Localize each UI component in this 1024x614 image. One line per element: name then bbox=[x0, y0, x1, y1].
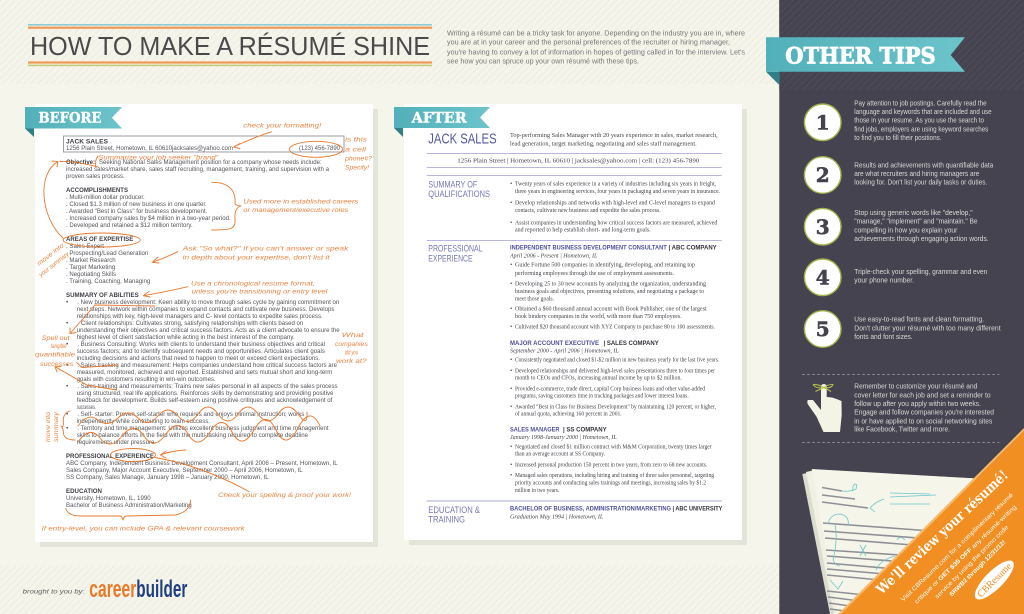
tip 2 bbox=[804, 157, 994, 193]
resume summary of abilities: including decisions and actions that need to happen to meet or exceed client expectations. bbox=[77, 355, 320, 362]
resume summary of abilities: goals with customers resulting in win-win outcomes. bbox=[77, 376, 216, 383]
resume objective: proven sales process. bbox=[66, 173, 125, 180]
brought to you by careerbuilder logo: brought to you by: bbox=[23, 588, 85, 595]
icon: finger with string reminder bbox=[807, 384, 842, 432]
after professional experience: • bbox=[510, 357, 512, 364]
after education and training bbox=[428, 505, 723, 524]
resume accomplishments: . Increased company sales by $4 million in a two-year period. bbox=[66, 215, 231, 222]
after professional experience: Provided e-commerce, trade direct, capital Corp business loans and other value-added bbox=[515, 385, 706, 392]
after professional experience: performing employees through the use of employment assessments. bbox=[515, 270, 674, 277]
resume areas of expertise: . Training, Coaching, Managing bbox=[66, 278, 151, 285]
handwritten annotations: or management/executive roles bbox=[243, 207, 349, 214]
resume summary of abilities: skills to balance efforts in the field with the multi-tasking required to complete deadline bbox=[77, 432, 308, 439]
after education and training: EDUCATION & bbox=[428, 505, 480, 515]
resume professional experience: PROFESSIONAL EXPEREINCE bbox=[66, 453, 155, 460]
after professional experience: Managed sales operations, including hiring and training of three sales personnel, targeting bbox=[515, 472, 715, 479]
tip 1 bbox=[804, 98, 992, 142]
handwritten annotations: unless you're transitioning or entry level bbox=[192, 288, 328, 295]
after professional experience: • bbox=[510, 306, 512, 313]
handwritten annotations: Specify! bbox=[345, 164, 369, 172]
resume summary of abilities: • bbox=[66, 411, 69, 418]
resume summary of abilities: measured, monitored, achieved and reported. Established and sets mutual short and long-term bbox=[77, 369, 333, 376]
handwritten annotations: What bbox=[342, 332, 365, 339]
after professional experience: Cultivated $20 thousand account with XYZ Company to purchase 80 to 100 assessments. bbox=[515, 324, 715, 331]
promo: orange corner banner: service by using the promo code bbox=[934, 524, 1011, 600]
resume summary of abilities: • bbox=[66, 383, 69, 390]
reminder text: Remember to customize your résumé and bbox=[854, 382, 977, 391]
tip 3 bbox=[804, 208, 989, 245]
after summary of qualifications bbox=[427, 180, 722, 240]
after summary of qualifications: QUALIFICATIONS bbox=[428, 189, 490, 199]
after summary of qualifications: • bbox=[510, 181, 512, 188]
after professional experience: September 2000 - April 2006 | Hometown, IL bbox=[510, 348, 619, 355]
resume summary of abilities: successes. bbox=[77, 404, 96, 411]
after professional experience: January 1998-January 2000 | Hometown, IL bbox=[510, 434, 617, 441]
resume contact box: 1256 Plain Street, Hometown, IL 60610jacksales@yahoo.com bbox=[66, 145, 233, 152]
after summary of qualifications: SUMMARY OF bbox=[428, 180, 478, 190]
brought to you by careerbuilder logo bbox=[23, 576, 187, 603]
panel: before resume bbox=[25, 104, 378, 547]
resume accomplishments: . Awarded "Best in Class" for business development. bbox=[66, 208, 207, 215]
resume summary of abilities: • bbox=[66, 341, 69, 348]
resume summary of abilities: Client relationships: Cultivates strong, satisfying relationships with clients based on bbox=[81, 320, 304, 327]
resume professional experience: Sales Company, Major Account Executive, September 2000 – April 2006, Hometown, IL bbox=[66, 467, 303, 474]
resume professional experience: SS Company, Sales Manage, January 1998 – January 2000, Hometown, IL bbox=[66, 474, 269, 481]
after professional experience: Awarded "Best in Class for Business Development" by maintaining 120 percent, or higher, bbox=[515, 403, 716, 410]
tip 2: Results and achievements with quantifiable data bbox=[854, 160, 994, 169]
panel: other tips sidebar bbox=[766, 0, 1024, 614]
resume summary of abilities: using structured, real life applications. Reinforces skills by demonstrating and providing positive bbox=[77, 390, 334, 397]
tip 2: looking for. Don't list your daily tasks or duties. bbox=[854, 178, 987, 187]
intro paragraph bbox=[447, 28, 745, 66]
reminder text: follow up after you apply within two weeks. bbox=[854, 399, 981, 408]
tip 5: Use easy-to-read fonts and clean formatting. bbox=[854, 315, 984, 324]
resume summary of abilities: feedback for development. Builds self-esteem using positive critiques and acknowledgement of bbox=[77, 397, 333, 404]
tip 5: fonts and font sizes. bbox=[854, 332, 913, 341]
promo: orange corner banner: Visit CBResume.com for a complimentary résumé bbox=[901, 492, 1015, 603]
after professional experience: • bbox=[510, 472, 512, 479]
intro paragraph: you are at in your career and the personal preferences of the recruiter or hiring manager, bbox=[447, 38, 730, 47]
tip 3: Stop using generic words like "develop," bbox=[854, 208, 973, 217]
reminder text: in or have applied to on social networking sites bbox=[854, 416, 993, 425]
resume contact box: JACK SALES bbox=[66, 138, 109, 146]
handwritten annotations: tangible bbox=[51, 343, 67, 350]
resume accomplishments: ACCOMPLISHMENTS bbox=[66, 187, 129, 194]
handwritten annotations: move into bbox=[36, 242, 66, 268]
resume objective: Objective: bbox=[66, 159, 95, 166]
resume accomplishments bbox=[66, 187, 231, 229]
after professional experience: meet those goals. bbox=[515, 295, 554, 302]
icon: marked-up resume pages bbox=[802, 469, 985, 614]
tip 2: are what recruiters and hiring managers are bbox=[854, 169, 979, 178]
reminder text bbox=[854, 382, 994, 433]
resume summary of abilities: • bbox=[66, 320, 69, 327]
resume summary of abilities: • bbox=[66, 299, 69, 306]
after professional experience: EXPERIENCE bbox=[428, 254, 473, 264]
after summary of qualifications: three years in engineering services, four years in packaging and seven years in insurance. bbox=[515, 188, 720, 195]
after summary of qualifications: and reported to help establish short- and long-term goals. bbox=[515, 227, 651, 234]
handwritten annotations: Ask "So what?" If you can't answer or speak bbox=[181, 246, 349, 253]
before ribbon: BEFORE bbox=[38, 111, 102, 127]
after education and training: TRAINING bbox=[428, 514, 465, 524]
resume accomplishments: . Closed $1.3 million of new business in one quarter. bbox=[66, 201, 207, 208]
promo: orange corner banner: critique or GET $35 OFF any résumé-writing bbox=[914, 505, 1018, 605]
resume summary of abilities: . Sales training and measurements: Trains new sales personal in all aspects of the sales process bbox=[77, 383, 338, 390]
after professional experience: book bindery companies in the world, with more than 750 employees. bbox=[515, 313, 682, 320]
resume summary of abilities: success factors; and to identify subsequent needs and opportunities. Articulates client goals bbox=[77, 348, 326, 355]
resume accomplishments: . Multi-million dollar producer. bbox=[66, 194, 145, 201]
tip 4 bbox=[804, 259, 987, 296]
logo: CBResume: CBResume bbox=[975, 561, 1015, 600]
resume education: Bachelor of Business Administration/Marketing bbox=[66, 502, 192, 509]
after summary of qualifications: contacts, cultivate new business and expedite the sales process. bbox=[515, 207, 661, 214]
handwritten annotations: Spell out bbox=[42, 335, 71, 342]
resume objective: Seeking National Sales Management position for a company whose needs include: bbox=[99, 159, 322, 166]
after professional experience: million in two years. bbox=[515, 487, 560, 494]
handwritten annotations: a cell bbox=[345, 146, 367, 154]
intro paragraph: see how you can spruce up your own résumé with these tips. bbox=[447, 56, 639, 66]
tip 1: 1 bbox=[816, 110, 830, 134]
tip 4: 4 bbox=[816, 266, 830, 290]
after professional experience: • bbox=[510, 461, 512, 468]
resume accomplishments: . Developed and retained a $12 million territory. bbox=[66, 222, 193, 229]
handwritten annotations: Check your spelling & proof your work! bbox=[218, 492, 351, 499]
intro paragraph: Writing a résumé can be a tricky task for anyone. Depending on the industry you are in, where bbox=[447, 28, 745, 37]
resume summary of abilities: . Self- starter: Proven self-starter who requires and enjoys minimal instruction; works bbox=[77, 411, 305, 418]
handwritten annotations: work at? bbox=[336, 358, 367, 365]
after professional experience: • bbox=[510, 324, 512, 331]
tip 1: to find you to fill their positions. bbox=[854, 133, 942, 142]
resume summary of abilities: . New business development: Keen ability to move through sales cycle by gaining commitment on bbox=[77, 299, 340, 306]
after summary of qualifications: Develop relationships and networks with high-level and C-level managers to expand bbox=[515, 200, 716, 207]
resume areas of expertise: . Market Research bbox=[66, 257, 116, 264]
resume summary of abilities: highest level of client satisfaction while acting in the best interest of the company. bbox=[77, 334, 295, 341]
tip 5 bbox=[804, 311, 1001, 347]
intro paragraph: you're having to convey a lot of information in hopes of getting called in for the interview. Let's bbox=[447, 47, 745, 56]
resume summary of abilities: . Territory and time management: Utilizes excellent business judgment and time management bbox=[77, 425, 329, 432]
handwritten annotations: is this bbox=[345, 137, 368, 144]
handwritten annotations: check your formatting! bbox=[243, 122, 321, 130]
handwritten annotations: successes bbox=[40, 361, 74, 368]
after professional experience: of annual quota, achieving 160 percent in 2001. bbox=[515, 411, 622, 418]
resume summary of abilities: . Sales tracking and measurement: Helps companies understand how critical success factors are bbox=[77, 362, 337, 369]
resume contact box: (123) 456-7890 bbox=[299, 145, 340, 152]
after professional experience: Guide Fortune 500 companies in identifying, developing, and retaining top bbox=[515, 262, 696, 269]
resume summary of abilities: relationships with key, high-level managers and C- level contacts to expedite sales process. bbox=[77, 313, 323, 320]
after professional experience: • bbox=[510, 281, 512, 288]
reminder text: Engage and follow companies you're interested bbox=[854, 408, 994, 417]
after professional experience: Developed relationships and delivered high-level sales presentations three to four times per bbox=[515, 367, 716, 374]
handwritten annotations: move into bbox=[45, 412, 52, 442]
after professional experience: INDEPENDENT BUSINESS DEVELOPMENT CONSULTANT bbox=[510, 245, 667, 252]
reminder text: cover letter for each job and set a reminder to bbox=[854, 390, 991, 399]
brought to you by careerbuilder logo: builder bbox=[136, 576, 187, 603]
resume education: EDUCATION bbox=[66, 488, 102, 495]
resume summary of abilities: requirements under pressure. bbox=[77, 439, 156, 446]
title: HOW TO MAKE A RÉSUMÉ SHINE bbox=[30, 31, 430, 61]
after professional experience: • bbox=[510, 367, 512, 374]
after professional experience: | SALES COMPANY bbox=[604, 340, 659, 347]
resume contact box bbox=[64, 136, 344, 152]
after professional experience: Increased personal production 150 percent in two years, from zero to 68 new accounts. bbox=[515, 461, 708, 468]
after education and training: Graduation May 1994 | Hometown, IL bbox=[510, 513, 604, 520]
tip 4: your phone number. bbox=[854, 276, 914, 285]
after summary of qualifications: • bbox=[510, 219, 512, 226]
promo: orange corner banner: SRWB2 through 12/31/12! bbox=[949, 540, 1007, 598]
after summary of qualifications: • bbox=[510, 200, 512, 207]
other tips ribbon bbox=[766, 37, 965, 85]
after professional experience: • bbox=[510, 403, 512, 410]
before ribbon bbox=[25, 107, 122, 137]
resume areas of expertise: . Target Marketing bbox=[66, 264, 116, 271]
handwritten annotations: your summary bbox=[37, 251, 71, 279]
resume areas of expertise: . Prospecting/Lead Generation bbox=[66, 250, 149, 257]
tip 3: achievements through engaging action words. bbox=[854, 234, 989, 243]
resume education bbox=[66, 488, 192, 509]
resume summary of abilities: • bbox=[66, 362, 69, 369]
after header: 1256 Plain Street | Hometown, IL 60610 | jacksales@yahoo.com | cell: (123) 456-7890 bbox=[457, 157, 700, 164]
after ribbon: AFTER bbox=[411, 111, 467, 127]
after header: JACK SALES bbox=[428, 131, 497, 147]
resume objective bbox=[66, 159, 329, 180]
handwritten annotations: summary bbox=[53, 411, 60, 442]
after professional experience: priority accounts and conducting sales trainings and meetings, increasing sales by $1.2 bbox=[515, 480, 706, 487]
after header: Top-performing Sales Manager with 20 years experience in sales, market research, bbox=[510, 132, 718, 139]
after professional experience: • bbox=[510, 385, 512, 392]
after professional experience: • bbox=[510, 443, 512, 450]
resume summary of abilities: understanding their objectives and critical success factors. Acts as a client advocate to ensure the bbox=[77, 327, 340, 334]
tip 1: find jobs, employers are using keyword searches bbox=[854, 124, 989, 133]
resume professional experience bbox=[66, 453, 338, 481]
after professional experience: PROFESSIONAL bbox=[428, 244, 483, 254]
handwritten annotations: Used more in established careers bbox=[243, 198, 359, 206]
after summary of qualifications: Assist companies in understanding how critical success factors are measured, achieved bbox=[515, 219, 718, 226]
handwritten annotations bbox=[35, 122, 372, 533]
tip 4: Triple-check your spelling, grammar and even bbox=[854, 267, 987, 276]
after header: lead generation, target marketing, negotiating and sales staff management. bbox=[510, 140, 697, 147]
after ribbon bbox=[394, 107, 490, 137]
after summary of qualifications: Twenty years of sales experience in a variety of industries including six years in freight, bbox=[515, 181, 716, 188]
tip 1: Pay attention to job postings. Carefully read the bbox=[854, 98, 987, 107]
handwritten annotations: Summarize your job seeker "brand" bbox=[98, 154, 219, 162]
after professional experience: than an average account at SS Company. bbox=[515, 451, 605, 458]
tip 3: "manage," "implement" and "maintain." Be bbox=[854, 217, 978, 226]
resume areas of expertise bbox=[66, 236, 151, 285]
tip 1: those in your resume. As you use the search to bbox=[854, 116, 984, 125]
after professional experience: April 2006 - Present | Hometown, IL bbox=[509, 252, 598, 259]
tip 3: 3 bbox=[816, 215, 830, 239]
after professional experience: Negotiated and closed $1 million contract with M&M Corporation, twenty times larger bbox=[515, 443, 712, 450]
panel: after resume bbox=[394, 104, 747, 545]
resume professional experience: ABC Company, Independent Business Development Consultant, April 2006 – Present, Hometown, IL bbox=[66, 460, 338, 467]
resume summary of abilities: • bbox=[66, 425, 69, 432]
after professional experience: • bbox=[510, 262, 512, 269]
resume summary of abilities: independently while contributing to team success. bbox=[77, 418, 210, 425]
after professional experience: month to CEOs and CFOs, increasing annual income by up to $2 million. bbox=[515, 375, 682, 382]
after education and training: | ABC UNIVERSITY bbox=[672, 506, 723, 513]
handwritten annotations: Use a chronological resume format, bbox=[191, 281, 315, 288]
promo: orange corner banner bbox=[838, 428, 1024, 614]
resume summary of abilities: SUMMARY OF ABILITIES bbox=[66, 292, 139, 299]
logo: CBResume bbox=[970, 555, 1019, 605]
handwritten annotations: If entry-level, you can include GPA & relevant coursework bbox=[42, 526, 246, 533]
after professional experience: | ABC COMPANY bbox=[668, 245, 717, 252]
tip 5: 5 bbox=[816, 317, 830, 341]
after professional experience: business goals and objectives, presenting solutions, and negotiating a package to bbox=[515, 288, 705, 295]
tip 3: compelling in how you explain your bbox=[854, 225, 958, 234]
tip 5: Don't clutter your résumé with too many different bbox=[854, 323, 1001, 332]
resume areas of expertise: . Negotiating Skills bbox=[66, 271, 117, 278]
resume summary of abilities bbox=[66, 292, 340, 446]
tip 2: 2 bbox=[816, 163, 830, 187]
resume education: University, Hometown, IL, 1990 bbox=[66, 495, 151, 502]
resume summary of abilities: . Business Consulting: Works with clients to understand their business objectives and critical bbox=[77, 341, 325, 348]
handwritten annotations: did you bbox=[345, 350, 358, 356]
after professional experience: Consistently negotiated and closed $1-$2 million in new business yearly for the last five years. bbox=[515, 357, 720, 364]
resume objective: increased sales/market share, sales staff recruiting, management, training, and supervision with a bbox=[66, 166, 329, 173]
handwritten annotations: in depth about your expertise, don't list it bbox=[183, 254, 331, 261]
resume summary of abilities: next steps. Network within companies to expand contacts and cultivate new business. Develops bbox=[77, 306, 335, 313]
reminder text: like Facebook, Twitter and more. bbox=[854, 424, 950, 433]
after professional experience: programs, saving customers time in tracking packages and lower interest loans. bbox=[515, 393, 689, 400]
after professional experience: Obtained a $60 thousand annual account with Book Publisher, one of the largest bbox=[515, 306, 707, 313]
tip 1: language and keywords that are included and use bbox=[854, 107, 992, 116]
after professional experience: MAJOR ACCOUNT EXECUTIVE bbox=[510, 340, 600, 347]
resume areas of expertise: AREAS OF EXPERTISE bbox=[66, 236, 134, 243]
after education and training: BACHELOR OF BUSINESS, ADMINISTRATION/MARKETING bbox=[510, 506, 671, 513]
after professional experience: SALES MANAGER bbox=[510, 427, 560, 434]
handwritten annotations: quantifiable bbox=[35, 352, 75, 358]
after professional experience bbox=[427, 244, 722, 501]
after header bbox=[427, 131, 722, 175]
brought to you by careerbuilder logo: career bbox=[89, 576, 136, 603]
after professional experience: Developing 25 to 30 new accounts by analyzing the organization, understanding bbox=[515, 281, 707, 288]
other tips ribbon: OTHER TIPS bbox=[785, 43, 936, 69]
handwritten annotations: companies bbox=[335, 341, 368, 348]
after professional experience: | SS COMPANY bbox=[563, 427, 607, 434]
resume areas of expertise: . Sales Expert bbox=[66, 243, 104, 250]
handwritten annotations: phone#? bbox=[344, 156, 372, 163]
